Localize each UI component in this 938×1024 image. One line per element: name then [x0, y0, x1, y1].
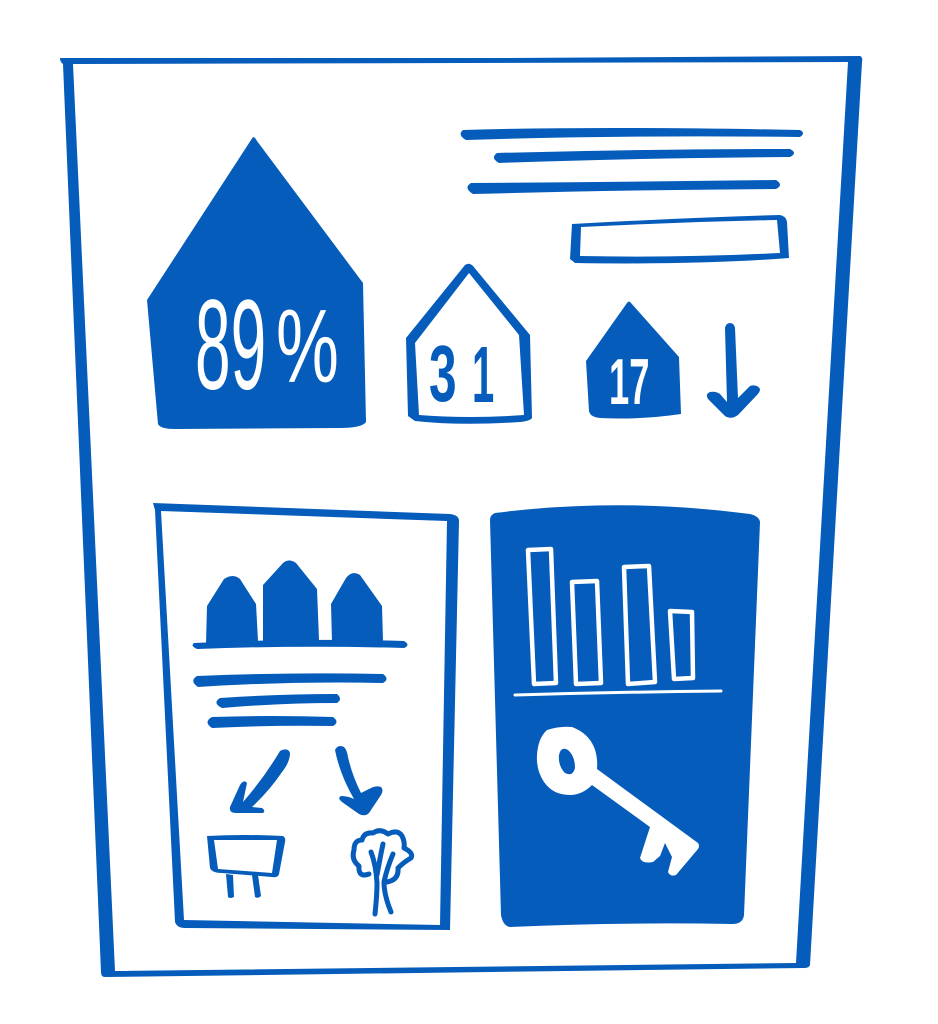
small house with 17	[586, 302, 681, 419]
icon: signboard	[207, 835, 285, 898]
large house with 89%	[147, 137, 366, 429]
text: percent sign: %	[276, 287, 339, 404]
panel: bar chart and key	[490, 505, 760, 927]
text: 89: 89	[195, 274, 266, 417]
text lines	[193, 673, 386, 728]
page frame	[60, 56, 862, 977]
bar chart	[515, 549, 721, 695]
outlined rectangle	[570, 215, 789, 263]
icon: row of houses	[193, 560, 408, 649]
icon: arrow left-down	[230, 749, 290, 813]
panel outline	[153, 503, 459, 930]
text: 31: 3	[429, 330, 457, 419]
text lines top right	[461, 128, 803, 194]
medium house with 31	[406, 264, 532, 424]
icon: arrow right-down	[335, 746, 382, 815]
icon: tree	[353, 831, 412, 914]
icon: down arrow	[707, 323, 760, 418]
medium house with 31: 1	[472, 331, 494, 420]
panel: houses and arrows	[153, 503, 459, 930]
icon: key	[537, 727, 699, 876]
text: 17: 17	[609, 346, 649, 419]
panel background	[490, 505, 760, 927]
